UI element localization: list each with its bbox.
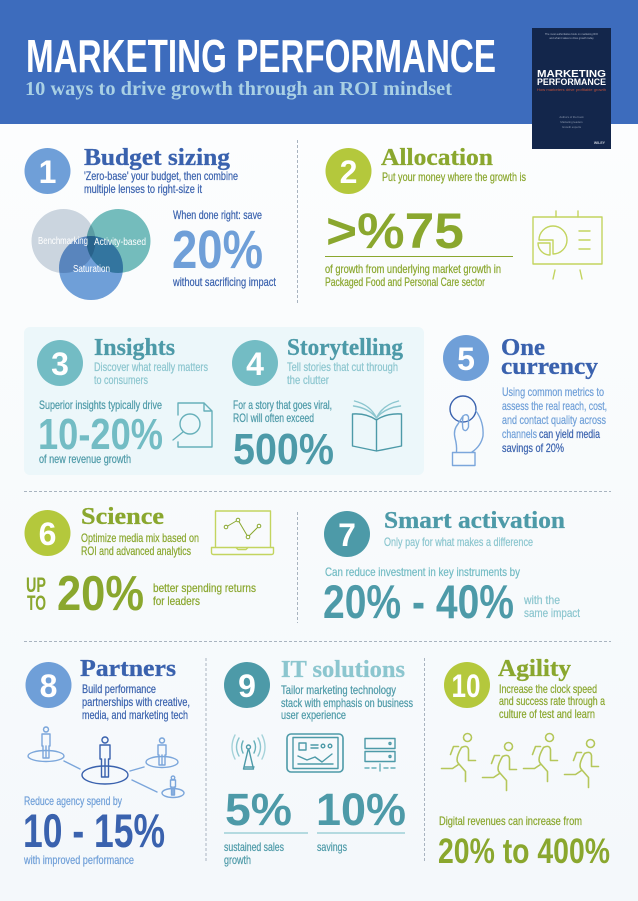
description: Build performance [82,682,156,696]
heading: Smart activation [384,508,565,534]
description: Only pay for what makes a difference [384,535,533,549]
icon: hand holding coin [450,396,483,466]
stat: 10%: savings [317,840,347,854]
stat: 10-20%: of new revenue growth [39,452,131,466]
stat: 10 - 15%: 10 - 15% [23,804,165,857]
description: and contact quality across [502,413,606,427]
stat: up to 20% [26,567,256,621]
stat: 20% - 40%: 20% - 40% [323,575,514,628]
number badge 5 [443,335,489,381]
number badge 10 [444,662,490,708]
number badge 10: 10 [452,668,480,704]
stat: 20% to 400%: Digital revenues can increase from [439,814,582,828]
description [84,169,238,196]
description: Optimize media mix based on [81,531,199,545]
stat: 20%: When done right: save [173,208,262,222]
icon: server [365,738,395,771]
stat: 500%: 500% [233,425,334,474]
icon: antenna tower [232,735,265,769]
number badge 6 [24,510,70,556]
stat: 5%: 5% [225,784,292,835]
book cover: Marketing leaders [560,120,583,124]
number badge 7 [324,511,370,557]
icon: open book [352,401,402,451]
icon: document with magnifier [173,403,212,447]
section 3 insights: to consumers [94,373,148,387]
panel: 10 agility [438,656,610,871]
stat: 10 - 15% [23,794,165,867]
stat: 20%: 20% [172,220,263,280]
number badge 8: 8 [40,668,57,704]
stat: 20% - 40%: Can reduce investment in key instruments by [325,565,520,579]
number badge 1: 1 [39,154,56,190]
stat: 5%: sustained sales [224,840,284,854]
description: Tell stories that cut through [287,360,398,374]
venn diagram: Benchmarking [38,236,88,247]
book cover: How marketers drive profitable growth [537,87,606,92]
book cover: Authors of the book [559,115,584,119]
description [82,682,190,722]
number badge 2 [326,148,372,194]
book cover: and what it takes to drive growth today [549,36,594,40]
stat: up to 20%: for leaders [153,594,200,608]
venn diagram: Activity-based [94,237,146,248]
stat: >%75 [325,203,513,289]
description: can yield media [539,427,600,441]
number badge 1 [24,148,70,194]
stat: 10%: 10% [316,784,406,835]
heading: Allocation [381,145,493,171]
heading: Partners [80,656,176,682]
book cover: Growth experts [562,125,582,129]
section 3 insights [37,335,212,466]
stat: 5%: growth [224,853,251,867]
description: savings of 20% [502,441,564,455]
icon: laptop with chart [212,511,274,554]
description: Put your money where the growth is [382,170,526,184]
stat: 20%: without sacrificing impact [172,275,277,289]
section 4 storytelling: the clutter [287,373,329,387]
description: Increase the clock speed [499,682,597,696]
header banner [0,0,638,124]
description [281,683,413,722]
stat: 10-20% [38,398,163,466]
stat: up to 20%: better spending returns [153,581,256,595]
description: culture of test and learn [499,707,595,721]
heading: Insights [94,335,175,361]
stat: >%75: Packaged Food and Personal Care sector [325,275,485,289]
stat: 20% - 40%: with the [523,593,560,607]
stat: 10 - 15%: with improved performance [23,853,134,867]
stat: up to 20%: 20% [57,567,144,621]
number badge 6: 6 [39,516,56,552]
icon: presentation board [533,211,602,279]
icon: partner network [28,727,184,798]
description: multiple lenses to right-size it [84,182,203,196]
description: media, and marketing tech [82,708,188,722]
stat: >%75: of growth from underlying market growth in [325,262,501,276]
stat: >%75: >%75 [326,203,464,259]
heading: Agility [498,656,571,682]
venn diagram [32,209,150,300]
stat: up to 20%: UP [26,574,46,597]
book cover: The most authoritative book on marketing ROI [545,32,598,36]
description: stack with emphasis on business [281,696,413,710]
description: Using common metrics to [502,385,604,399]
panel: 2 allocation [325,145,602,289]
stat: 10 - 15%: Reduce agency spend by [24,794,122,808]
stat: 500% [233,398,334,474]
description: Tailor marketing technology [281,683,396,697]
subtitle: 10 ways to drive growth through an ROI mindset [25,78,452,100]
panel: 6 science: ROI and advanced analytics [81,544,191,558]
icon: dashboard tablet [287,734,343,772]
panel: 6 science [24,504,274,621]
number badge 4: 4 [246,346,264,382]
description: channels [502,427,537,441]
number badge 3 [37,340,83,386]
icon: four runners [442,734,598,790]
heading [501,335,598,380]
panel: 1 budget sizing [24,145,277,300]
stat: 5% [224,784,308,867]
stat: 20% - 40%: same impact [524,606,581,620]
number badge 5: 5 [457,341,475,377]
book cover: PERFORMANCE [537,77,606,88]
heading: IT solutions [281,657,405,683]
number badge 3: 3 [51,346,69,382]
panel: 8 partners [23,656,190,867]
number badge 8 [26,662,72,708]
description [502,385,607,455]
panel: 5 one currency [443,335,607,466]
heading: currency [501,354,598,380]
description: user experience [281,708,346,722]
number badge 7: 7 [338,517,356,553]
number badge 2: 2 [340,154,357,190]
number badge 9: 9 [238,668,256,704]
description [499,682,605,721]
section 4 storytelling [232,335,403,474]
description: Discover what really matters [94,360,208,374]
stat: 10-20%: 10-20% [38,410,163,459]
venn diagram: Saturation [73,264,110,275]
book cover: WILEY [594,141,606,145]
heading: Science [81,504,164,530]
description: 'Zero-base' your budget, then combine [84,169,238,183]
book cover [532,28,611,149]
stat: up to 20%: TO [27,592,46,615]
number badge 4 [232,340,278,386]
number badge 9 [224,662,270,708]
description: partnerships with creative, [82,695,190,709]
panel: 3 and 4 background [24,327,424,475]
heading: Storytelling [287,335,403,361]
stat: 500%: For a story that goes viral, [233,398,332,412]
heading: Budget sizing [84,145,230,171]
stat: 500%: ROI will often exceed [233,411,314,425]
heading: One [501,335,545,361]
stat: 10-20%: Superior insights typically drive [39,398,162,412]
stat: 20% to 400% [438,814,610,871]
book cover: MARKETING [537,68,606,80]
panel: 9 IT solutions [224,657,413,867]
panel: 7 smart activation [323,508,581,628]
